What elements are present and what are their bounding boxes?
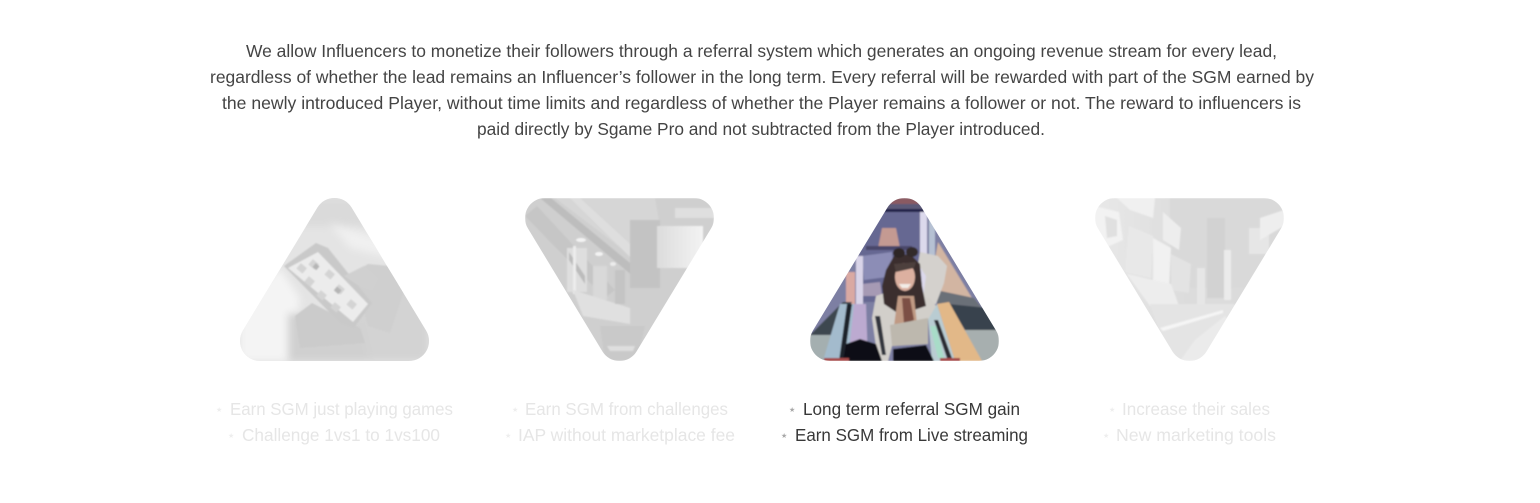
figure: smiling girl (843, 247, 947, 361)
caption: referral and live streaming: ★ (781, 432, 787, 440)
photo: industrial hall (525, 198, 714, 361)
caption: playing games (216, 399, 453, 445)
infographic canvas (211, 44, 1314, 444)
caption: challenges and fees: ★ (505, 432, 511, 440)
caption: playing games: ★ (216, 406, 222, 414)
caption: referral and live streaming: ★ (789, 406, 795, 414)
caption: sales and marketing: Increase their sales (1122, 399, 1270, 419)
caption: challenges and fees: ★ (512, 406, 518, 414)
caption: referral and live streaming: Long term referral SGM gain (803, 399, 1020, 419)
intro paragraph (210, 41, 1314, 139)
panel: challenges and marketplace (faded) (505, 198, 735, 445)
photo: city street at night (1095, 198, 1284, 361)
caption: challenges and fees: IAP without marketplace fee (518, 425, 735, 445)
panel: sales and marketing (faded) (1095, 198, 1284, 445)
caption: sales and marketing: ★ (1109, 406, 1115, 414)
caption: challenges and fees (505, 399, 735, 445)
photo: hands holding phone (240, 198, 429, 361)
panel: influencer referral (active) (781, 198, 1028, 445)
intro paragraph: regardless of whether the lead remains an Influencer’s follower in the long term. Every referral will be rewarded with part of the SGM earned by (210, 67, 1314, 87)
caption: sales and marketing (1103, 399, 1276, 445)
caption: playing games: ★ (228, 432, 234, 440)
caption: referral and live streaming (781, 399, 1028, 445)
caption: challenges and fees: Earn SGM from challenges (525, 399, 728, 419)
caption: referral and live streaming: Earn SGM from Live streaming (795, 425, 1028, 445)
photo: girl in arcade (810, 198, 999, 361)
intro paragraph: paid directly by Sgame Pro and not subtracted from the Player introduced. (477, 119, 1045, 139)
caption: playing games: Challenge 1vs1 to 1vs100 (242, 425, 440, 445)
caption: sales and marketing: ★ (1103, 432, 1109, 440)
intro paragraph: We allow Influencers to monetize their followers through a referral system which generates an ongoing revenue stream for every lead, (246, 41, 1277, 61)
caption: sales and marketing: New marketing tools (1116, 425, 1276, 445)
caption: playing games: Earn SGM just playing games (230, 399, 453, 419)
panel: playing games (faded) (216, 198, 453, 445)
intro paragraph: the newly introduced Player, without time limits and regardless of whether the Player remains a follower or not. The reward to influencers is (222, 93, 1301, 113)
